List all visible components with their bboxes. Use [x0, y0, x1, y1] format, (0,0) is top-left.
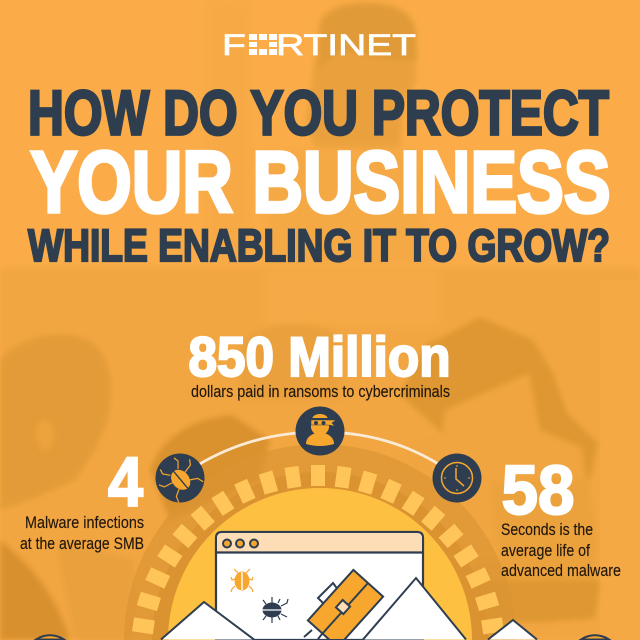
stat caption: at the average SMB — [20, 534, 144, 553]
icon: clock — [432, 454, 482, 502]
browser title bar — [217, 533, 422, 552]
stat caption: dollars paid in ransoms to cybercriminals — [191, 382, 450, 401]
stat: 850 million: 850 Million — [188, 325, 450, 388]
left person — [0, 334, 111, 510]
icon: Fortinet grid O — [249, 34, 277, 55]
stat: 4 malware infections: 4 — [108, 443, 143, 521]
dashes ring — [132, 465, 504, 634]
speed lines — [304, 630, 322, 639]
stat caption: Seconds is the — [501, 520, 593, 539]
icon: robber — [296, 406, 344, 456]
sun disc — [168, 488, 472, 640]
briefcase handle — [318, 583, 339, 604]
icon: orange bug — [231, 569, 253, 592]
stat caption — [501, 520, 621, 580]
mountain: centre right — [363, 578, 466, 640]
stat: 58 seconds — [501, 451, 621, 580]
window buttons — [223, 540, 258, 548]
stat caption — [20, 513, 144, 553]
connecting arc — [198, 432, 440, 465]
mountain: left — [161, 602, 254, 640]
stat caption: Malware infections — [25, 513, 144, 532]
stat: 58 seconds: 58 — [502, 451, 574, 529]
logo: Fortinet wordmark: FORTINET — [222, 29, 416, 62]
stat caption: advanced malware — [501, 561, 621, 580]
mountain: far right — [488, 620, 537, 640]
bottom left circle icon — [36, 635, 64, 640]
right person — [400, 317, 598, 485]
sunburst: dark band, dashes and sun — [124, 444, 516, 640]
mountains — [161, 578, 537, 640]
bottom right circle icon — [581, 635, 609, 640]
title — [28, 79, 610, 271]
browser window illustration — [216, 532, 423, 640]
stat caption: average life of — [501, 541, 590, 560]
icon: dark bug — [262, 597, 288, 623]
icon: bug — [152, 451, 206, 505]
centre person — [244, 326, 336, 396]
icon: flying briefcase — [304, 570, 383, 640]
stat: 4 malware infections — [20, 443, 144, 553]
